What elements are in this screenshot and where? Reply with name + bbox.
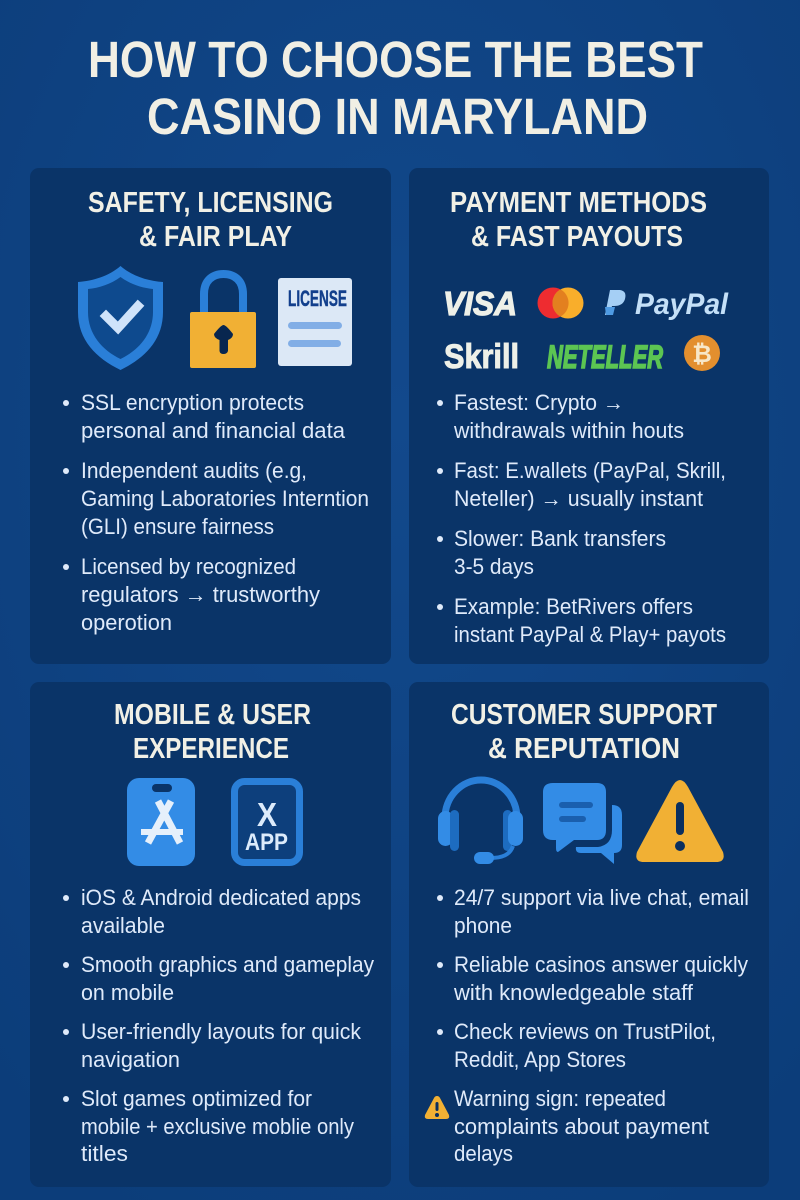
text block: safety bullets: SSL encryption protects	[81, 390, 304, 415]
text block: mobile bullets: on mobile	[81, 980, 174, 1005]
heading: payments: PAYMENT METHODS	[450, 187, 707, 219]
text block: support bullets: complaints about payment	[454, 1114, 709, 1139]
heading: mobile: EXPERIENCE	[133, 733, 289, 765]
text block: payment bullets: Example: BetRivers offers	[454, 594, 693, 619]
icon: PayPal logo: PayPal	[635, 288, 729, 321]
text block: safety bullets: Independent audits (e.g,	[81, 458, 307, 483]
text block: support bullets: with knowledgeable staff	[453, 980, 694, 1005]
heading: safety: SAFETY, LICENSING	[88, 187, 333, 219]
heading: safety: & FAIR PLAY	[139, 221, 292, 253]
heading: payments	[450, 187, 707, 253]
icon: Mastercard logo	[538, 288, 584, 318]
icon: warning triangle	[636, 780, 724, 862]
text block: support bullets	[437, 885, 749, 1166]
title: CASINO IN MARYLAND	[147, 88, 648, 145]
heading: payments: & FAST PAYOUTS	[471, 221, 683, 253]
text block: mobile bullets: iOS & Android dedicated apps	[81, 885, 361, 910]
icon: X app badge	[234, 782, 300, 862]
text block: support bullets: Check reviews on TrustPilot,	[454, 1019, 716, 1044]
text block: safety bullets: operotion	[81, 610, 172, 635]
panel: safety, licensing and fair play	[30, 168, 391, 664]
text block: mobile bullets: navigation	[81, 1047, 180, 1072]
heading: mobile: MOBILE & USER	[114, 699, 311, 731]
text block: mobile bullets: Slot games optimized for	[81, 1086, 312, 1111]
text block: payment bullets	[437, 390, 726, 647]
text block: payment bullets: Fastest: Crypto →	[454, 390, 624, 415]
text block: payment bullets: Neteller) → usually instant	[454, 486, 703, 511]
icon: Skrill logo: Skrill	[444, 338, 519, 376]
icon: Visa logo: VISA	[443, 285, 517, 322]
title: HOW TO CHOOSE THE BEST	[88, 31, 703, 88]
icon: small warning triangle	[425, 1096, 449, 1119]
panel: mobile and user experience	[30, 682, 391, 1187]
text block: payment bullets: withdrawals within houts	[453, 418, 684, 443]
icon: crypto coin	[684, 335, 720, 371]
panel: customer support and reputation	[409, 682, 769, 1187]
icon: license document	[278, 278, 352, 366]
text block: safety bullets	[63, 390, 369, 635]
text block: mobile bullets: available	[81, 913, 165, 938]
text block: mobile bullets: User-friendly layouts for quick	[81, 1019, 362, 1044]
icon: app store phone	[127, 778, 195, 866]
icon: X app badge: APP	[245, 829, 288, 856]
heading: support: CUSTOMER SUPPORT	[451, 699, 717, 731]
icon: license document: LICENSE	[288, 286, 347, 311]
text block: mobile bullets: mobile + exclusive moblie only	[81, 1114, 354, 1139]
text block: mobile bullets: Smooth graphics and gameplay	[81, 952, 374, 977]
text block: safety bullets: regulators → trustworthy	[81, 582, 320, 607]
text block: support bullets: delays	[454, 1141, 513, 1166]
icon: shield with check	[78, 266, 163, 370]
panel: payment methods and fast payouts	[409, 168, 769, 664]
text block: support bullets: 24/7 support via live chat, email	[454, 885, 749, 910]
text block: safety bullets: (GLI) ensure fairness	[81, 514, 274, 539]
text block: support bullets: Warning sign: repeated	[454, 1086, 666, 1111]
title	[88, 31, 703, 145]
text block: mobile bullets	[63, 885, 374, 1166]
text block: mobile bullets: titles	[81, 1141, 128, 1166]
text block: support bullets: phone	[454, 913, 512, 938]
icon: headset	[438, 780, 523, 864]
heading: mobile	[114, 699, 311, 765]
text block: payment bullets: Fast: E.wallets (PayPal, Skrill,	[454, 458, 726, 483]
text block: safety bullets: Gaming Laboratories Interntion	[81, 486, 369, 511]
heading: support: & REPUTATION	[488, 733, 680, 765]
text block: safety bullets: personal and financial data	[81, 418, 346, 443]
icon: padlock	[190, 274, 256, 368]
icon: X app badge: X	[257, 796, 277, 833]
text block: safety bullets: Licensed by recognized	[81, 554, 296, 579]
text block: support bullets: Reliable casinos answer quickly	[454, 952, 748, 977]
icon: crypto coin: ₿	[692, 341, 712, 368]
icon: chat bubbles	[543, 783, 622, 864]
text block: payment bullets: 3-5 days	[454, 554, 534, 579]
heading: safety	[88, 187, 333, 253]
text block: payment bullets: instant PayPal & Play+ payots	[454, 622, 726, 647]
heading: support	[451, 699, 717, 765]
text block: support bullets: Reddit, App Stores	[454, 1047, 626, 1072]
text block: payment bullets: Slower: Bank transfers	[454, 526, 666, 551]
icon: Neteller logo: NETELLER	[547, 339, 663, 375]
